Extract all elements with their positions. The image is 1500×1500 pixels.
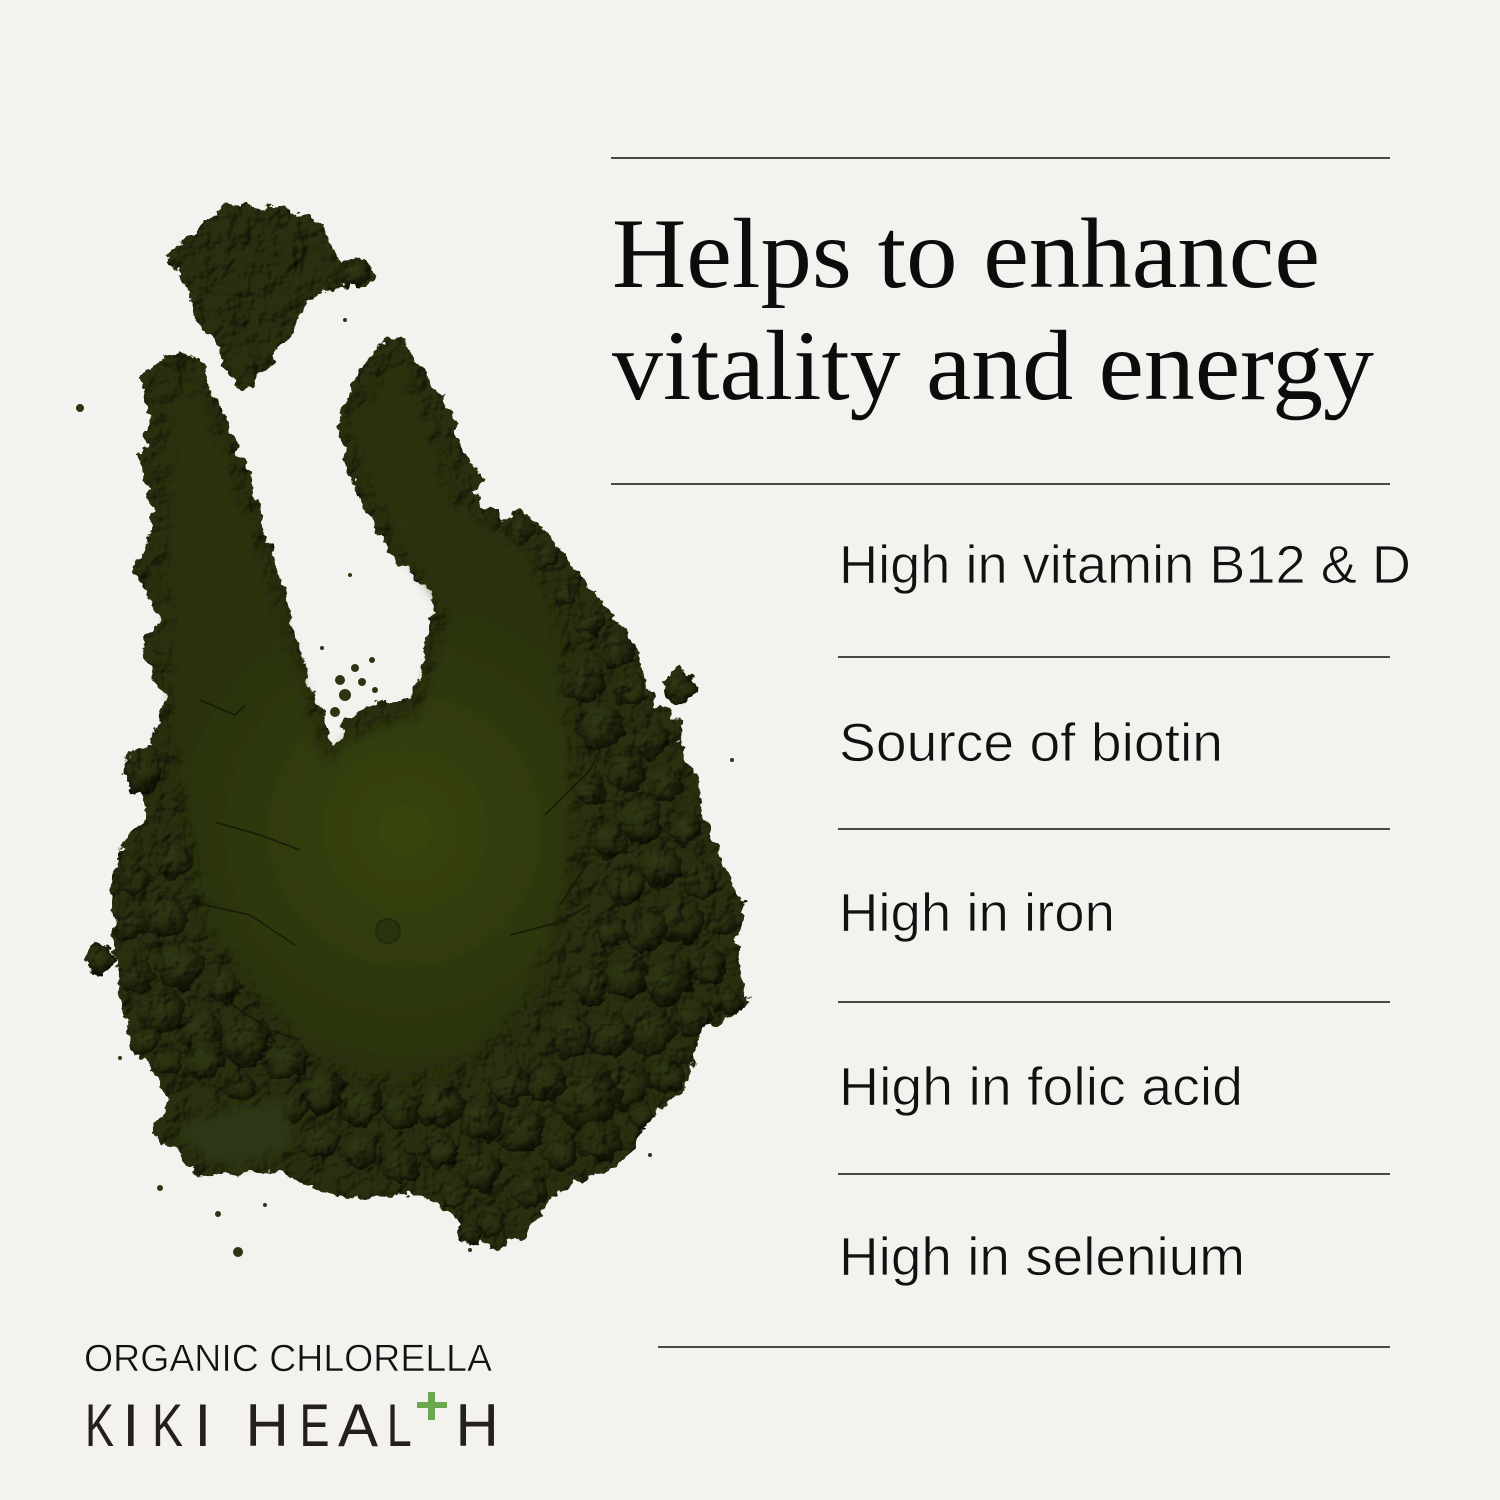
logo: Kiki Health: K [85,1392,114,1459]
smooth chunk at lower left [175,1100,292,1165]
rule below title [611,483,1390,485]
benefit: iron: High in iron [839,883,1115,943]
logo: Kiki Health: H [456,1392,499,1459]
logo: Kiki Health: K [152,1392,183,1459]
product name: ORGANIC CHLORELLA [84,1338,493,1380]
smooth centre of the powder [170,362,570,1078]
title [612,198,1374,421]
powder base shape with crumbs [85,205,748,1250]
title: Helps to enhance [612,198,1320,309]
benefit: vitamin B12 and D: High in vitamin B12 & D [839,535,1411,595]
icon: green plus [417,1392,447,1420]
logo: Kiki Health: A [338,1392,378,1459]
logo: Kiki Health: L [387,1392,412,1459]
image: chlorella powder pile [76,205,748,1257]
logo: Kiki Health: I [194,1392,211,1459]
logo: Kiki Health: H [246,1392,289,1459]
logo: Kiki Health: E [300,1392,330,1459]
benefit: folic acid: High in folic acid [839,1057,1243,1117]
loose specks [76,278,734,1257]
benefits list [658,535,1411,1347]
rule above title [611,157,1390,159]
title: vitality and energy [612,310,1374,421]
logo: Kiki Health: I [122,1392,139,1459]
small dent in the powder [376,919,400,943]
logo: Kiki Health [85,1392,499,1459]
cracks in the powder [200,700,600,1040]
benefit: biotin: Source of biotin [839,713,1223,773]
benefit: selenium: High in selenium [839,1227,1245,1287]
